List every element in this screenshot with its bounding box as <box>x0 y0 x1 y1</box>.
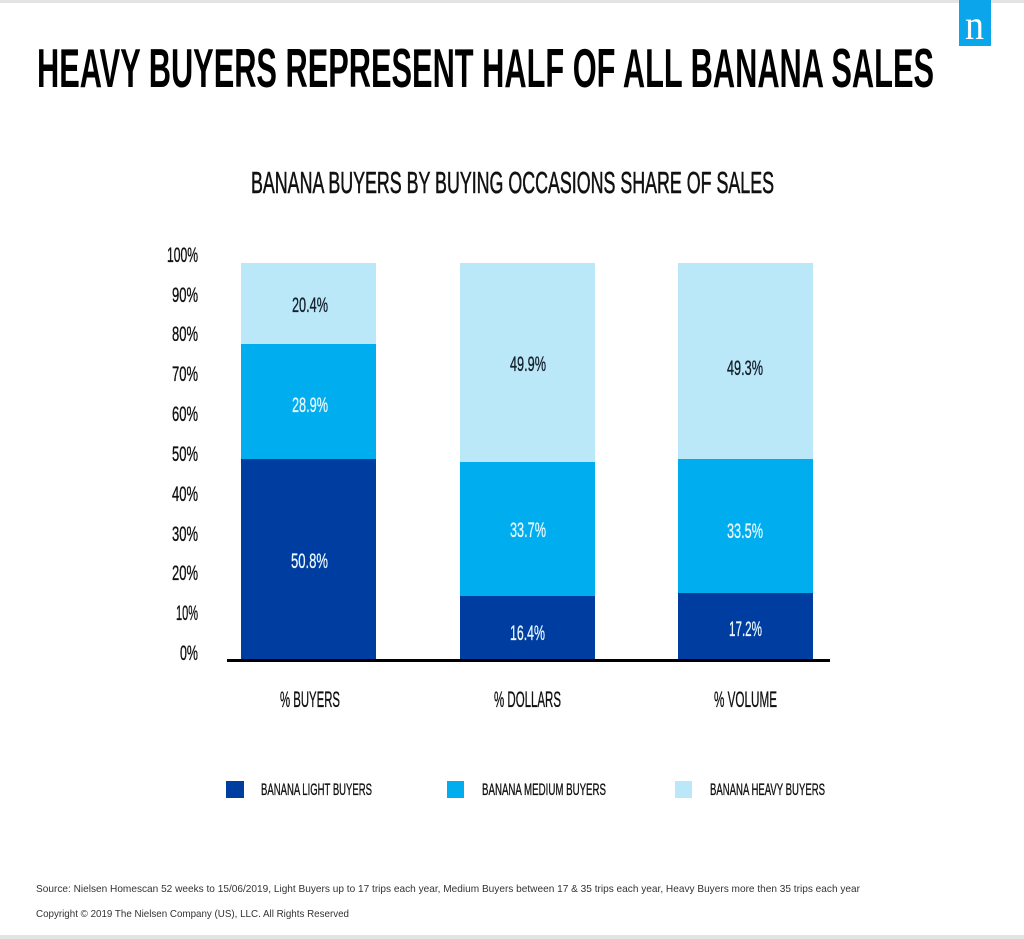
y axis labels: 90% <box>172 284 198 307</box>
bar: % volume: 17.2% <box>729 618 762 641</box>
legend: medium buyers <box>447 780 606 799</box>
copyright note: Copyright © 2019 The Nielsen Company (US), LLC. All Rights Reserved <box>36 908 349 920</box>
bar: % volume: 33.5% <box>727 520 763 543</box>
x axis labels: % VOLUME <box>714 687 777 712</box>
legend: heavy buyers: BANANA HEAVY BUYERS <box>710 780 825 799</box>
legend: light buyers <box>226 780 372 799</box>
y axis labels <box>167 244 198 665</box>
legend: light buyers: BANANA LIGHT BUYERS <box>261 780 372 799</box>
bar: % dollars: 33.7% <box>510 519 546 542</box>
x axis labels: % DOLLARS <box>494 687 561 712</box>
source note: Source: Nielsen Homescan 52 weeks to 15/06/2019, Light Buyers up to 17 trips each year, Medium Buyers between 17 & 35 trips each year, Heavy Buyers more then 35 trips each year <box>36 883 860 895</box>
y axis labels: 40% <box>172 483 198 506</box>
legend: heavy buyers <box>675 780 825 799</box>
bar: % dollars <box>460 263 595 660</box>
bar: % buyers: 50.8% <box>291 550 328 573</box>
y axis labels: 30% <box>172 523 198 546</box>
y axis labels: 50% <box>172 443 198 466</box>
x axis labels <box>280 687 777 712</box>
bar: % volume <box>678 263 813 660</box>
y axis labels: 20% <box>172 562 198 585</box>
icon: Nielsen logo: n <box>965 3 984 49</box>
icon: Nielsen logo <box>959 0 991 49</box>
bar: % buyers: 20.4% <box>292 294 328 317</box>
x axis labels: % BUYERS <box>280 687 340 712</box>
stacked bar chart <box>167 244 830 712</box>
bar: % dollars: 49.9% <box>510 353 546 376</box>
bar: % buyers <box>241 263 376 660</box>
bar: % buyers: 28.9% <box>292 394 328 417</box>
y axis labels: 100% <box>167 244 198 267</box>
legend <box>226 780 825 799</box>
y axis labels: 60% <box>172 403 198 426</box>
y axis labels: 10% <box>176 602 198 625</box>
x axis line <box>227 659 830 662</box>
bar: % dollars: 16.4% <box>510 622 545 645</box>
bar: % volume: 49.3% <box>727 357 763 380</box>
y axis labels: 80% <box>172 323 198 346</box>
y axis labels: 0% <box>180 642 198 665</box>
y axis labels: 70% <box>172 363 198 386</box>
legend: medium buyers: BANANA MEDIUM BUYERS <box>482 780 606 799</box>
